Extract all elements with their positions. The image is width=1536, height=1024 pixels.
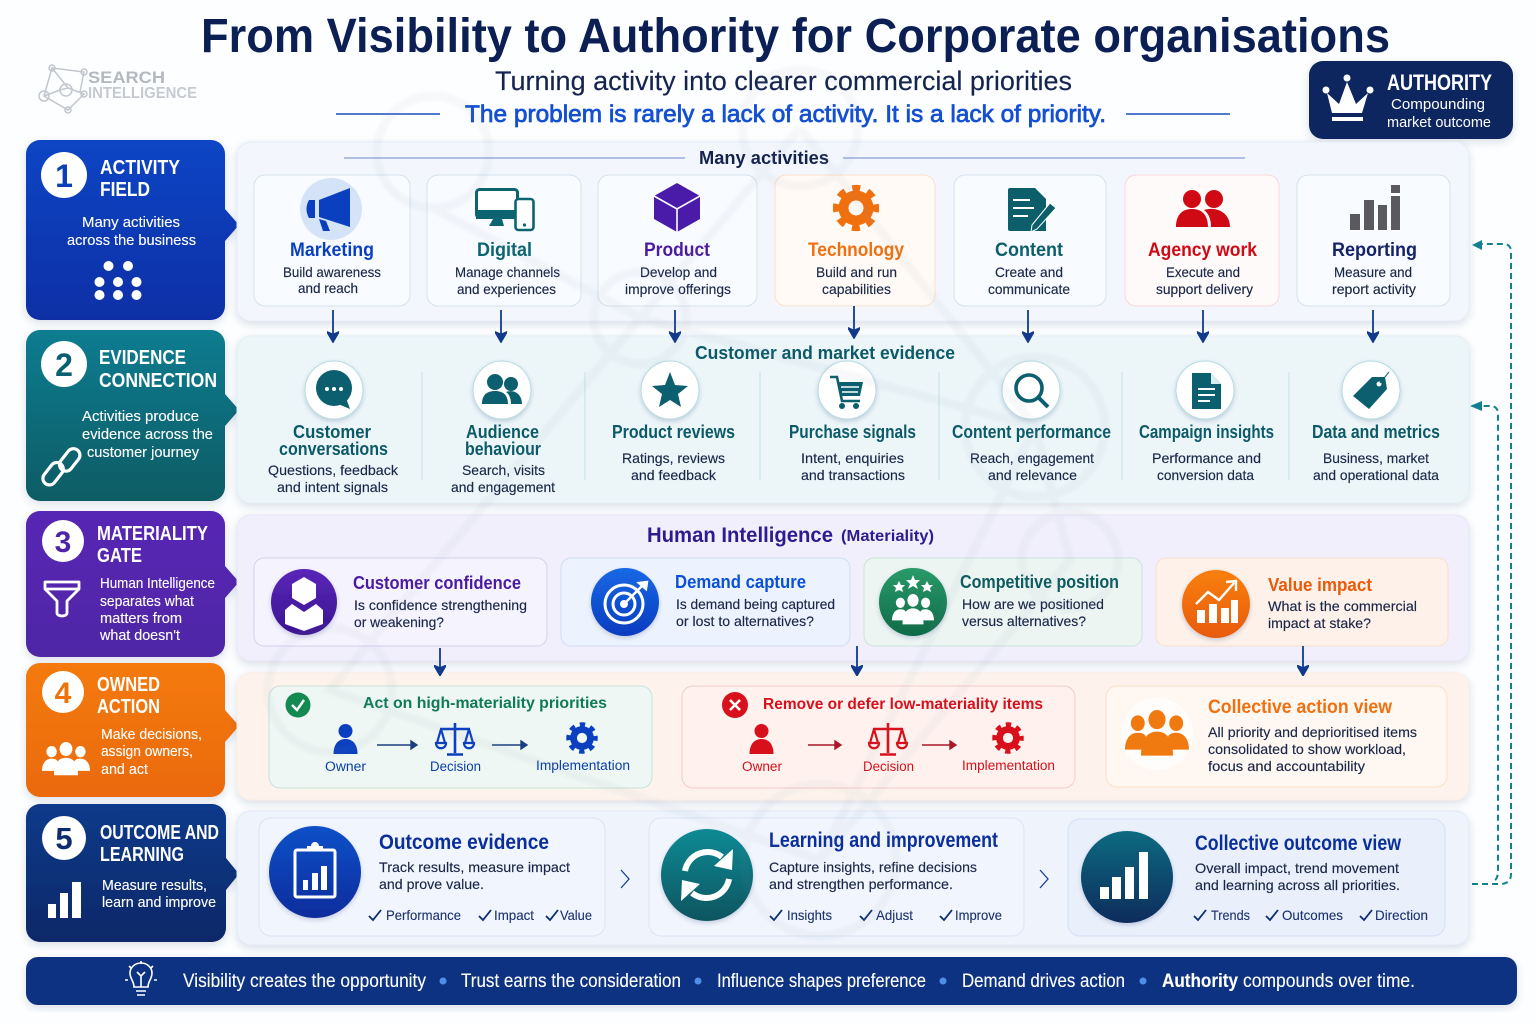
card: product: Product: [644, 240, 711, 261]
panel: step 4 owned action: 4: [55, 677, 72, 710]
icon: growth chart: [1182, 570, 1250, 638]
icon: bars: [1081, 831, 1173, 923]
tagline: The problem is rarely a lack of activity. It is a lack of priority.: [465, 101, 1106, 128]
card: remove or defer low-materiality items: Owner: [742, 759, 783, 774]
icon: clipboard chart: [269, 826, 361, 918]
card: content: Create and: [995, 264, 1063, 280]
watermark: network: [268, 70, 1118, 936]
panel: step 2 evidence connection: Activities produce: [82, 409, 199, 425]
panel: step 1 activity field: FIELD: [100, 179, 150, 201]
panel: human intelligence: [237, 515, 1469, 661]
item: audience behaviour: [451, 361, 555, 495]
icon: chain link: [40, 446, 83, 488]
panel: step 4 owned action: assign owners,: [101, 744, 193, 760]
card: collective action view: consolidated to show workload,: [1208, 741, 1406, 757]
card: demand capture: Demand capture: [675, 572, 806, 592]
card: act on high-materiality priorities: Owner: [325, 759, 367, 774]
card: learning and improvement: [649, 818, 1024, 936]
card: remove or defer low-materiality items: Remove or defer low-materiality items: [763, 696, 1043, 713]
checklist: Outcomes: [1282, 907, 1343, 923]
logo: Search Intelligence: [39, 65, 197, 113]
item: data and metrics: and operational data: [1313, 467, 1439, 483]
panel: step 4 owned action: and act: [101, 762, 148, 778]
chevron: [1040, 870, 1048, 888]
card: collective action view: [1106, 686, 1447, 787]
card: customer confidence: or weakening?: [354, 614, 444, 630]
card: collective action view: Collective action view: [1208, 697, 1392, 718]
card: act on high-materiality priorities: Implementation: [536, 758, 630, 773]
authority badge: market outcome: [1387, 114, 1491, 131]
panel: step 5 outcome and learning: 5: [55, 821, 73, 856]
checklist: Insights: [787, 907, 832, 923]
item: data and metrics: Business, market: [1323, 450, 1429, 466]
item: purchase signals: Intent, enquiries: [801, 450, 904, 466]
panel: step 2 evidence connection: evidence across the: [82, 427, 213, 443]
checklist: [770, 907, 1002, 923]
panel: activities: [237, 142, 1469, 321]
logo: Search Intelligence: SEARCH: [88, 68, 165, 87]
card: value impact: [1156, 558, 1448, 646]
panel: step 2 evidence connection: EVIDENCE: [99, 347, 186, 369]
feedback loop arrows: [1470, 240, 1511, 884]
card: outcome evidence: Track results, measure impact: [379, 859, 570, 875]
item: customer conversations: [268, 361, 399, 495]
item: purchase signals: [789, 361, 916, 483]
checklist: Trends: [1211, 907, 1250, 923]
panel: outcomes: [237, 811, 1469, 945]
logo: Search Intelligence: INTELLIGENCE: [88, 85, 197, 102]
icon: check badge: [286, 692, 310, 718]
icon: implementation gear: [569, 725, 595, 751]
card: collective action view: All priority and deprioritised items: [1208, 724, 1417, 740]
card: outcome evidence: Outcome evidence: [379, 831, 549, 854]
arrows: materiality to action: [434, 646, 1309, 676]
card: customer confidence: Is confidence strengthening: [354, 597, 527, 613]
footer banner: Visibility creates the opportunity: [183, 971, 426, 992]
panel: step 3 materiality gate: what doesn't: [99, 628, 180, 644]
card: digital: and experiences: [457, 281, 556, 297]
item: content performance: Reach, engagement: [970, 450, 1094, 466]
panel: step 3 materiality gate: [26, 511, 239, 657]
card: learning and improvement: and strengthen performance.: [769, 876, 953, 892]
card: collective outcome view: and learning across all priorities.: [1195, 877, 1400, 893]
icon: document and pen: [1008, 188, 1056, 232]
panel: step 4 owned action: [26, 663, 239, 797]
panel: step 2 evidence connection: [26, 330, 239, 501]
card: marketing: Build awareness: [283, 264, 381, 280]
card: collective outcome view: Overall impact, trend movement: [1195, 860, 1399, 876]
icon: star: [652, 372, 688, 407]
card: agency work: Agency work: [1148, 240, 1257, 261]
card: competitive position: versus alternatives?: [962, 613, 1086, 629]
panel: step 3 materiality gate: MATERIALITY: [97, 523, 209, 545]
icon: bars: [48, 882, 81, 918]
card: competitive position: How are we positioned: [962, 596, 1104, 612]
card: value impact: What is the commercial: [1268, 598, 1417, 614]
icon: magnifier: [1016, 375, 1048, 407]
card: reporting: report activity: [1332, 281, 1416, 297]
heading: human intelligence: Human Intelligence: [647, 524, 833, 547]
authority badge: [1309, 61, 1513, 139]
checklist: Performance: [386, 907, 461, 923]
item: campaign insights: Campaign insights: [1139, 422, 1274, 442]
icon: audience: [482, 374, 522, 404]
item: data and metrics: [1312, 361, 1440, 483]
heading: human intelligence: (Materiality): [841, 528, 934, 545]
card: collective outcome view: Collective outcome view: [1195, 832, 1402, 855]
icon: hexagons: [271, 569, 337, 635]
icon: bar chart: [1350, 185, 1400, 230]
item: campaign insights: conversion data: [1157, 467, 1254, 483]
card: customer confidence: Customer confidence: [353, 573, 521, 593]
card: content: communicate: [988, 281, 1070, 297]
icon: dots: [94, 261, 142, 300]
panel: customer and market evidence: [237, 336, 1469, 503]
checklist: Value: [560, 907, 592, 923]
footer banner: Influence shapes preference: [717, 971, 926, 992]
item: product reviews: Product reviews: [612, 422, 735, 442]
icon: gear: [837, 189, 875, 227]
item: product reviews: Ratings, reviews: [622, 450, 725, 466]
card: demand capture: or lost to alternatives?: [676, 613, 814, 629]
item: purchase signals: Purchase signals: [789, 422, 916, 442]
card: act on high-materiality priorities: [269, 686, 652, 788]
card: technology: Build and run: [816, 264, 897, 280]
card: agency work: [1125, 175, 1279, 306]
panel: step 5 outcome and learning: learn and improve: [102, 895, 216, 911]
footer banner: Trust earns the consideration: [461, 971, 681, 992]
icon: funnel: [45, 582, 79, 616]
card: agency work: support delivery: [1156, 281, 1253, 297]
card: act on high-materiality priorities: Act on high-materiality priorities: [363, 695, 607, 712]
panel: step 2 evidence connection: customer journey: [87, 445, 200, 461]
card: digital: Digital: [477, 240, 532, 261]
arrow: [808, 741, 841, 749]
arrow: [377, 741, 417, 749]
card: content: Content: [995, 240, 1064, 261]
card: demand capture: [561, 558, 850, 646]
item: customer conversations: and intent signals: [277, 479, 388, 495]
footer banner: Demand drives action: [962, 971, 1125, 992]
card: technology: Technology: [808, 240, 904, 261]
item: data and metrics: Data and metrics: [1312, 422, 1440, 442]
card: reporting: Measure and: [1334, 264, 1412, 280]
card: learning and improvement: Learning and improvement: [769, 829, 998, 852]
card: product: improve offerings: [625, 281, 731, 297]
arrow: [922, 741, 956, 749]
item: content performance: and relevance: [988, 467, 1077, 483]
icon: owner: [750, 724, 774, 754]
card: technology: capabilities: [822, 281, 891, 297]
icon: devices: [476, 190, 534, 230]
footer banner: Authority: [1162, 971, 1238, 992]
card: marketing: Marketing: [290, 240, 374, 261]
card: product: [598, 175, 757, 306]
panel: step 4 owned action: Make decisions,: [101, 727, 202, 743]
item: customer conversations: conversations: [279, 439, 388, 459]
subtitle: Turning activity into clearer commercial priorities: [495, 66, 1072, 96]
checklist: Improve: [955, 907, 1002, 923]
panel: step 1 activity field: Many activities: [82, 215, 180, 231]
card: digital: Manage channels: [455, 264, 560, 280]
icon: rated team: [879, 568, 947, 636]
card: competitive position: Competitive position: [960, 572, 1119, 592]
chevron: [621, 870, 629, 888]
icon: light bulb: [125, 961, 157, 995]
item: audience behaviour: behaviour: [465, 439, 541, 459]
panel: step 1 activity field: 1: [55, 158, 73, 194]
panel: step 1 activity field: ACTIVITY: [100, 157, 181, 179]
card: marketing: and reach: [298, 280, 358, 296]
card: collective outcome view: [1068, 819, 1445, 936]
heading: human intelligence: [647, 524, 934, 547]
icon: decision scales: [869, 723, 907, 754]
icon: tag: [1353, 372, 1389, 409]
panel: step 5 outcome and learning: [26, 804, 239, 942]
card: learning and improvement: Capture insights, refine decisions: [769, 859, 977, 875]
card: remove or defer low-materiality items: [682, 686, 1075, 788]
item: content performance: Content performance: [952, 422, 1111, 442]
arrow: [492, 741, 527, 749]
authority badge: Compounding: [1391, 96, 1485, 113]
item: product reviews: and feedback: [631, 467, 717, 483]
panel: step 5 outcome and learning: LEARNING: [100, 844, 184, 866]
checklist: [1194, 907, 1428, 923]
panel: action: [237, 673, 1469, 800]
icon: cart: [830, 377, 863, 409]
panel: step 1 activity field: across the business: [67, 233, 196, 249]
card: reporting: Reporting: [1332, 240, 1417, 261]
item: customer conversations: Questions, feedback: [268, 462, 399, 478]
panel: step 4 owned action: OWNED: [97, 674, 160, 696]
checklist: [369, 907, 592, 923]
heading: many activities: Many activities: [699, 148, 829, 168]
authority badge: AUTHORITY: [1387, 70, 1492, 95]
icon: target: [591, 568, 659, 636]
icon: team: [1121, 698, 1193, 770]
card: outcome evidence: [259, 818, 605, 936]
panel: step 2 evidence connection: 2: [55, 347, 73, 383]
item: audience behaviour: Search, visits: [462, 462, 545, 478]
icon: refresh: [661, 829, 753, 921]
arrows: activities to evidence: [327, 306, 1379, 342]
card: agency work: Execute and: [1166, 264, 1240, 280]
item: campaign insights: Performance and: [1152, 450, 1261, 466]
item: customer conversations: Customer: [293, 422, 371, 442]
card: product: Develop and: [640, 264, 717, 280]
icon: team: [42, 742, 90, 775]
icon: implementation gear: [995, 725, 1021, 751]
footer banner: [26, 957, 1517, 1005]
panel: step 3 materiality gate: separates what: [100, 594, 194, 610]
title: From Visibility to Authority for Corporate organisations: [201, 10, 1390, 63]
card: reporting: [1297, 175, 1450, 306]
footer banner: compounds over time.: [1243, 971, 1415, 992]
panel: step 3 materiality gate: 3: [55, 526, 71, 559]
icon: cross badge: [722, 692, 748, 718]
panel: step 3 materiality gate: GATE: [97, 545, 142, 567]
panel: step 3 materiality gate: matters from: [100, 611, 182, 627]
icon: owner: [334, 724, 358, 754]
checklist: Direction: [1375, 907, 1428, 923]
item: content performance: [952, 361, 1111, 483]
card: collective action view: focus and accountability: [1208, 758, 1365, 774]
icon: two people: [1176, 190, 1230, 227]
card: remove or defer low-materiality items: Decision: [863, 759, 914, 774]
panel: step 5 outcome and learning: OUTCOME AND: [100, 822, 219, 844]
panel: step 1 activity field: [26, 140, 239, 320]
card: competitive position: [864, 558, 1142, 646]
panel: step 2 evidence connection: CONNECTION: [99, 370, 217, 392]
heading: evidence: Customer and market evidence: [695, 343, 955, 363]
panel: step 4 owned action: ACTION: [97, 696, 160, 718]
icon: document: [1192, 373, 1221, 409]
checklist: Adjust: [876, 907, 913, 923]
card: act on high-materiality priorities: Decision: [430, 759, 481, 774]
icon: chat: [316, 370, 352, 409]
card: outcome evidence: and prove value.: [379, 876, 484, 892]
card: marketing: [254, 175, 410, 306]
card: technology: [775, 175, 935, 306]
card: customer confidence: [254, 558, 547, 646]
item: audience behaviour: and engagement: [451, 479, 555, 495]
card: digital: [427, 175, 581, 306]
item: campaign insights: [1139, 361, 1274, 483]
item: purchase signals: and transactions: [801, 467, 905, 483]
card: value impact: Value impact: [1268, 575, 1372, 595]
item: audience behaviour: Audience: [466, 422, 539, 442]
panel: step 5 outcome and learning: Measure results,: [102, 878, 207, 894]
card: content: [954, 175, 1106, 306]
panel: step 3 materiality gate: Human Intelligence: [100, 576, 215, 592]
icon: crown: [1322, 74, 1374, 121]
card: demand capture: Is demand being captured: [676, 596, 835, 612]
item: product reviews: [612, 361, 735, 483]
checklist: Impact: [494, 907, 534, 923]
icon: megaphone: [300, 178, 362, 240]
icon: decision scales: [436, 723, 474, 754]
icon: cube: [654, 183, 700, 232]
card: value impact: impact at stake?: [1268, 615, 1371, 631]
card: remove or defer low-materiality items: Implementation: [962, 758, 1055, 773]
